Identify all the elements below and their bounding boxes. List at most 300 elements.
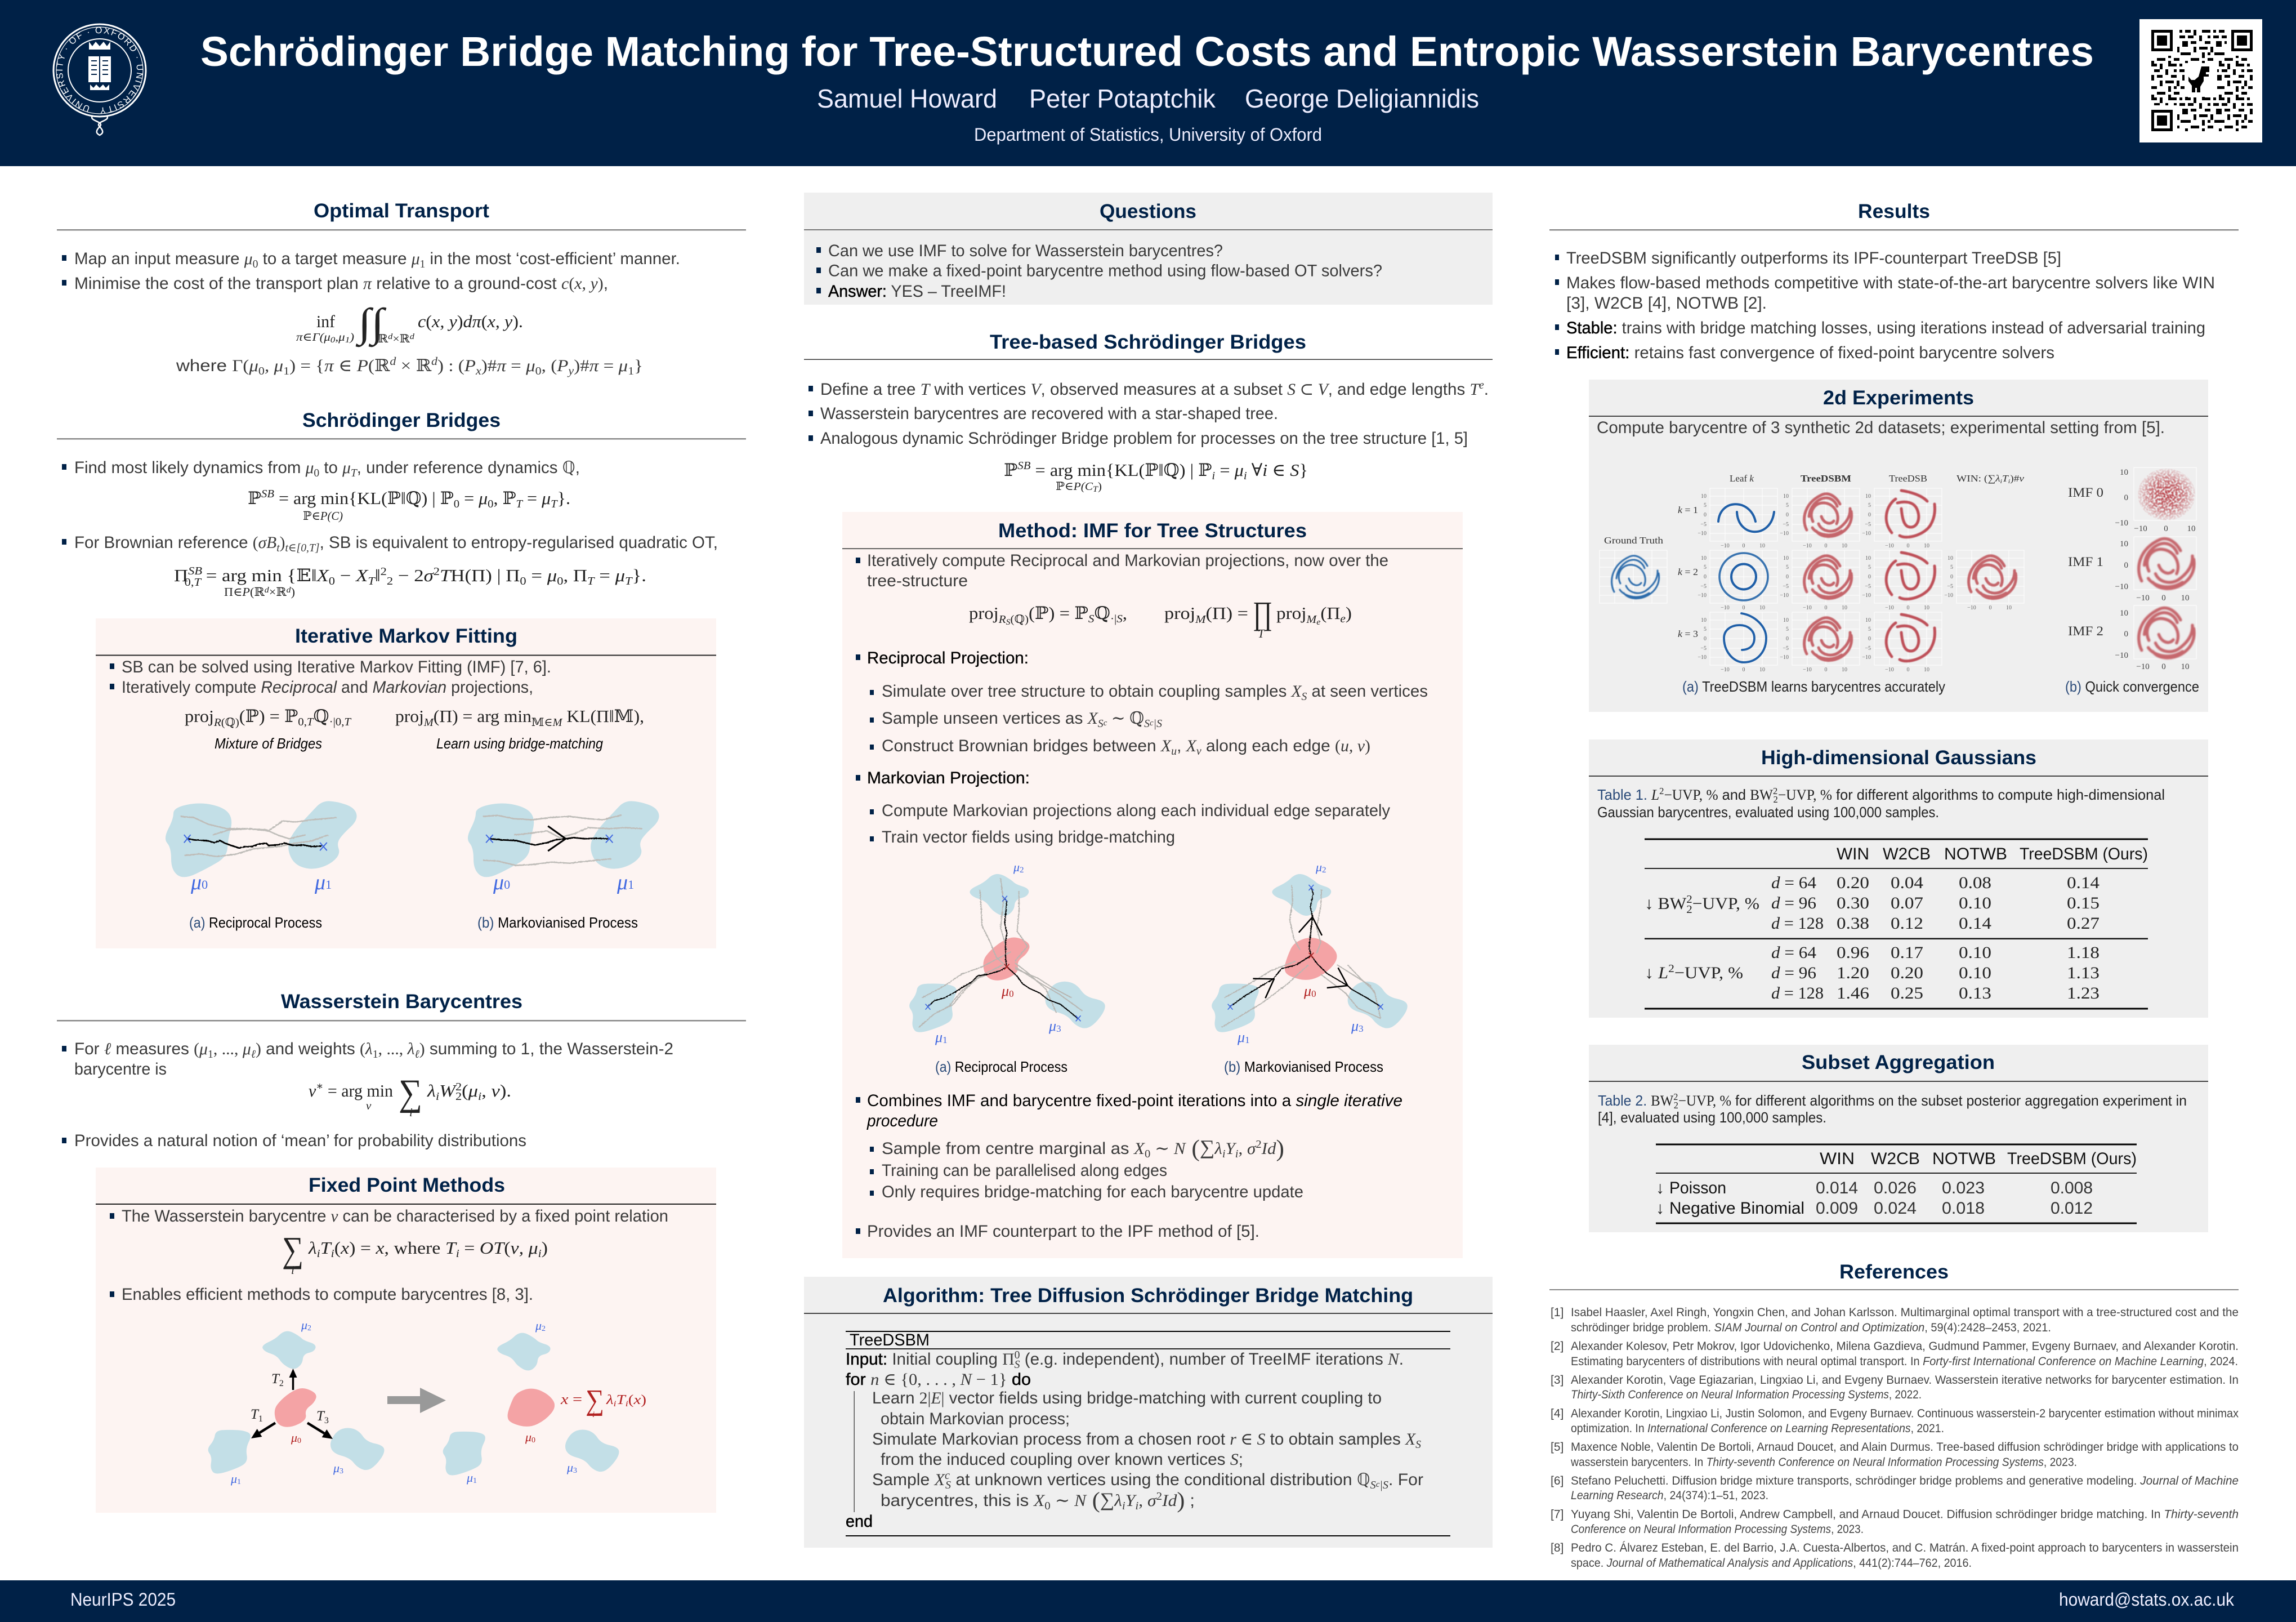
equation: coupling set: y — [567, 365, 574, 377]
algorithm box: Y — [1125, 1491, 1137, 1510]
diagram: barycentre at fixed point — [443, 1318, 646, 1485]
reference list: [8] — [1551, 1541, 1564, 1554]
plot: leaf k=1 — [1698, 488, 1777, 549]
plot: leaf k=1: −10 — [1721, 543, 1730, 549]
equation: coupling set: π = μ — [589, 357, 627, 375]
algorithm box: S — [1370, 1479, 1376, 1491]
equation: entropic OT: X — [315, 565, 329, 585]
plot: TreeDSBM k=1: 10 — [1783, 493, 1789, 500]
equation: Markovian tree projection: proj — [1276, 603, 1305, 623]
reciprocal projection steps: S — [1302, 690, 1307, 703]
table 1: 0.27 — [2067, 914, 2100, 933]
panel: optimal transport — [57, 200, 746, 377]
plot: TreeDSBM k=1: −10 — [1780, 531, 1789, 537]
heading: Results — [1858, 200, 1930, 222]
equation: entropic OT — [174, 565, 646, 599]
diagram: barycentre at fixed point: T — [617, 1393, 627, 1407]
reciprocal projection steps: c — [1104, 719, 1107, 728]
diagram: barycentre at fixed point: i — [592, 1410, 595, 1419]
equation: tree SB: ) — [1098, 480, 1102, 493]
bullets: Stable: trains with bridge matching losses, using iterations instead of adversarial training — [1566, 319, 2205, 337]
reciprocal projection steps: u — [1171, 745, 1177, 757]
equation: entropic OT: d — [265, 586, 269, 595]
reference list: Yuyang Shi, Valentin De Bortoli, Andrew Campbell, and Arnaud Doucet. Diffusion schrödinger bridge matching. In Thirty-seventh — [1571, 1508, 2239, 1521]
equation: SB problem: ℙ∈P(C) — [303, 509, 343, 523]
diagram: barycentre at fixed point: ∑ — [586, 1384, 604, 1416]
reciprocal projection steps: Sample unseen vertices as X — [882, 709, 1098, 728]
equation: entropic OT: T — [587, 575, 596, 587]
table 2: 0.014 — [1816, 1179, 1858, 1197]
plot: TreeDSBM k=2: 10 — [1783, 555, 1789, 562]
equation: entropic OT: T — [625, 575, 633, 587]
bullet: definition — [62, 1040, 673, 1079]
bullet: combined iteration: N — [1173, 1139, 1187, 1158]
bullet: combined iteration — [856, 1091, 1402, 1201]
algorithm box: ∑ — [1100, 1490, 1114, 1510]
equation: coupling set: P — [556, 357, 568, 375]
table 2: ↓ — [1656, 1199, 1664, 1218]
diagram: barycentre at fixed point: 3 — [573, 1467, 577, 1475]
table 1: −UVP, % — [1674, 964, 1743, 982]
diagram: Markovianised process: μ — [493, 871, 504, 894]
table caption: Table 1. L — [1597, 786, 1659, 803]
reciprocal projection steps: Simulate over tree structure to obtain coupling samples X — [882, 682, 1302, 701]
table caption: for different algorithms to compute high-dimensional — [1836, 786, 2173, 803]
heading: Method: IMF for Tree Structures — [998, 520, 1307, 542]
diagram: transport maps to measures: T — [251, 1407, 258, 1422]
bullet list: μ — [411, 249, 420, 268]
table 1: 0.13 — [1959, 984, 1991, 1002]
plot: leaf k=2: 0 — [1742, 605, 1745, 611]
plot: leaf k=3: 10 — [1701, 617, 1707, 623]
plot: leaf k=3: 5 — [1704, 626, 1707, 632]
reference list: Thirty-Sixth Conference on Neural Information Processing Systems, 2022. — [1571, 1388, 1922, 1401]
algorithm box: (e.g. independent), number of TreeIMF iterations — [1020, 1350, 1388, 1369]
plot: TreeDSBM k=1: −5 — [1783, 522, 1789, 528]
diagram: reciprocal process on tree: 2 — [1020, 866, 1024, 875]
equation: entropic OT: − — [335, 565, 356, 585]
bullets — [1555, 249, 2215, 362]
panel: high-dimensional Gaussians — [1589, 739, 2208, 1018]
diagram: transport maps to measures — [208, 1318, 384, 1486]
bullet: Brownian reference: , SB is equivalent to entropy-regularised quadratic OT, — [320, 533, 718, 552]
algorithm box: TreeDSBM — [850, 1331, 930, 1349]
reference list: wasserstein barycenters. In Thirty-seventh Conference on Neural Information Processing Systems, 2023. — [1570, 1456, 2077, 1469]
plot: leaf k=2: −10 — [1721, 605, 1730, 611]
plot: TreeDSBM k=3: −5 — [1783, 645, 1789, 652]
table 2: 0.018 — [1942, 1199, 1985, 1218]
diagram: Markovianised process on tree: μ — [1238, 1029, 1245, 1045]
diagram: Markovianised process on tree: μ — [1304, 983, 1311, 999]
equation: barycentre: ∑ — [399, 1072, 422, 1113]
diagram: Markovianised process on tree: 2 — [1322, 866, 1326, 875]
panel: tree-based Schrödinger bridges — [804, 331, 1493, 494]
algorithm box: i — [1135, 1500, 1138, 1512]
plot: TreeDSBM k=3: 10 — [1842, 667, 1847, 673]
reference list: Alexander Korotin, Vage Egiazarian, Lingxiao Li, and Evgeny Burnaev. Wasserstein iterative networks for barycenter estimation. In — [1571, 1374, 2239, 1387]
equation: coupling set: P — [464, 357, 476, 375]
column headers: i — [2008, 478, 2010, 485]
equation: Markovian tree projection: (Π) = — [1206, 603, 1248, 623]
equation: SB problem: = — [459, 488, 479, 508]
bullet: definition: barycentre is — [74, 1060, 167, 1079]
reciprocal projection steps: S — [1098, 718, 1104, 730]
equation: SB problem — [248, 488, 570, 523]
plot: TreeDSBM k=3: 0 — [1786, 636, 1789, 642]
bullet: definition: , ..., — [378, 1040, 408, 1058]
equation: coupling set: 1 — [283, 365, 289, 377]
table 1: 0.20 — [1891, 964, 1923, 982]
plot: leaf k=3: −10 — [1721, 667, 1730, 673]
bullet: dynamics: to — [319, 458, 342, 477]
diagram: barycentre at fixed point: x = — [560, 1391, 582, 1407]
plot: WIN: 10 — [1947, 555, 1953, 562]
panel: Wasserstein barycentres — [57, 991, 746, 1150]
reference list: Alexander Kolesov, Petr Mokrov, Igor Udovichenko, Milena Gazdieva, Gudmund Pammer, Evgeny Burnaev, and Alexander Korotin. — [1571, 1340, 2239, 1353]
reciprocal projection steps: , — [1177, 737, 1186, 755]
column headers: )# — [2010, 473, 2020, 484]
equation: reciprocal tree projection: ·| — [1110, 613, 1116, 625]
reference list: Learning Research, 24(374):1–51, 2023. — [1571, 1489, 1768, 1502]
reciprocal projection steps: along each edge — [1201, 737, 1335, 755]
table 1: 1.13 — [2067, 964, 2100, 982]
ground truth plot — [1600, 535, 1667, 603]
column headers: i — [2000, 478, 2002, 485]
algorithm box: λ — [1114, 1491, 1122, 1510]
equation: entropic OT: 0 — [520, 575, 526, 587]
diagram: transport maps to measures: μ — [231, 1472, 237, 1486]
equation: entropic OT: SB — [188, 565, 202, 577]
equation: coupling set: 0 — [258, 365, 265, 377]
bullet: combined iteration: 0 — [1145, 1148, 1150, 1160]
equation: OT problem: inf — [316, 311, 336, 331]
row labels: k = 1 — [1678, 505, 1698, 515]
table caption: −UVP, % — [1664, 787, 1718, 803]
bullet list: 0 — [253, 258, 258, 270]
algorithm box: from the induced coupling over known vertices S; — [881, 1450, 1243, 1469]
equation: reciprocal projection: proj — [185, 706, 213, 726]
plot: TreeDSBM k=3: −10 — [1780, 654, 1789, 661]
bullet: definition: 1 — [373, 1048, 378, 1060]
diagram: transport maps to measures: μ — [333, 1461, 340, 1475]
algorithm box: Input: Initial coupling Π — [846, 1350, 1015, 1369]
plot: TreeDSBM k=3: 10 — [1783, 617, 1789, 623]
diagram: barycentre at fixed point: 1 — [473, 1477, 477, 1485]
diagram: barycentre at fixed point: 2 — [542, 1325, 546, 1333]
plot: TreeDSBM k=3: 0 — [1824, 667, 1828, 673]
equation: barycentre: = arg min — [323, 1081, 393, 1100]
reciprocal projection steps: X — [1186, 737, 1198, 755]
table caption: [4], evaluated using 100,000 samples. — [1598, 1109, 1826, 1126]
footer — [0, 1580, 2296, 1622]
bullets: Efficient: retains fast convergence of fixed-point barycentre solvers — [1566, 344, 2054, 362]
algorithm box: obtain Markovian process; — [881, 1410, 1070, 1428]
bullet: definition: ℓ — [251, 1048, 256, 1060]
plot: leaf k=1: 0 — [1704, 512, 1707, 518]
table caption: 2 — [1674, 1100, 1678, 1111]
bullet: definition: λ — [407, 1040, 414, 1058]
icon: University of Oxford crest: UNIVERSITY · OF · OXFORD · UNIVERSITY — [56, 27, 143, 114]
equation: coupling set: )# — [481, 357, 497, 375]
heading: High-dimensional Gaussians — [1761, 747, 2036, 769]
diagram: barycentre at fixed point: λ — [606, 1393, 614, 1407]
panel: 2d experiments — [1589, 380, 2208, 712]
plot: leaf k=1: 5 — [1704, 502, 1707, 509]
equation: reciprocal tree projection: (ℚ) — [1011, 613, 1029, 626]
algorithm box: Learn 2|E| vector fields using bridge-matching with current coupling to — [872, 1389, 1382, 1407]
diagram: barycentre at fixed point: μ — [525, 1430, 531, 1444]
diagram: transport maps to measures: 1 — [237, 1478, 241, 1486]
table 1: 1.20 — [1837, 964, 1869, 982]
equation: fixed point: ∑ — [282, 1229, 303, 1269]
diagram: transport maps to measures: μ — [301, 1318, 307, 1332]
plot: TreeDSB k=2: 10 — [1924, 605, 1929, 611]
equation: entropic OT: T — [368, 575, 376, 587]
diagram: transport maps to measures: 3 — [324, 1416, 329, 1425]
bullet: dynamics: Find most likely dynamics from μ — [74, 458, 314, 477]
diagram: reciprocal process on tree: 3 — [1056, 1023, 1061, 1034]
diagram: barycentre at fixed point: i — [626, 1400, 628, 1409]
diagram: transport maps to measures: 1 — [258, 1414, 263, 1424]
algorithm box: S — [945, 1479, 951, 1491]
algorithm box: ∼ — [1051, 1491, 1074, 1510]
equation: reciprocal projection: ℚ — [314, 706, 329, 726]
table caption: −UVP, % — [1678, 1093, 1731, 1109]
equation: coupling set: , ( — [542, 357, 557, 375]
algorithm box: S — [1015, 1358, 1020, 1371]
diagram: Markovianised process on tree: μ — [1316, 860, 1322, 874]
equation: SB problem: = — [522, 488, 542, 508]
table 1: 0.25 — [1891, 984, 1923, 1002]
bullet: combined iteration: ∼ — [1150, 1139, 1174, 1158]
equation: Markovian tree projection: M — [1195, 613, 1207, 626]
reciprocal projection steps: Reciprocal Projection: — [867, 649, 1029, 667]
equation: entropic OT: μ — [614, 565, 625, 585]
table 1: 0.14 — [1959, 914, 1991, 933]
equation: coupling set: 0 — [535, 365, 542, 377]
plot: IMF 0: −10 — [2134, 524, 2147, 533]
bullets: Can we use IMF to solve for Wasserstein barycentres? — [828, 242, 1223, 260]
plot: leaf k=3: 0 — [1704, 636, 1707, 642]
equation: barycentre: i — [478, 1090, 481, 1103]
plot: IMF 0: 10 — [2120, 468, 2128, 477]
plot: TreeDSBM k=1: 0 — [1786, 512, 1789, 518]
algorithm box: Sample X — [872, 1471, 945, 1489]
bullets: Iteratively compute Reciprocal and Markovian projections, — [122, 678, 533, 697]
bullet: dynamics — [62, 458, 580, 479]
table 1: 0.10 — [1959, 894, 1991, 912]
caption b: (b) Markovianised Process — [477, 914, 638, 931]
equation: reciprocal tree projection: , — [1123, 603, 1127, 623]
authors: Peter Potaptchik — [1029, 84, 1216, 113]
equation: entropic OT: ×ℝ — [269, 585, 287, 599]
column headers: WIN: (∑ λ — [1956, 473, 2000, 484]
equation: entropic OT: 0 — [329, 575, 335, 587]
equation: coupling set: × ℝ — [396, 357, 432, 375]
plot: IMF 1: IMF 1 — [2068, 555, 2103, 569]
diagram: reciprocal process on tree — [909, 860, 1105, 1045]
equation: entropic OT: − 2 — [393, 565, 424, 585]
diagram: transport maps to measures: T — [271, 1371, 279, 1387]
diagram: Markovianised process on tree: 1 — [1245, 1035, 1250, 1045]
equation: entropic OT: , Π — [563, 565, 587, 585]
algorithm box: , — [1138, 1491, 1147, 1510]
reference list: Maxence Noble, Valentin De Bortoli, Arnaud Doucet, and Alain Durmus. Tree-based diffusion schrödinger bridge with applications to — [1571, 1441, 2239, 1454]
table 1: 2 — [1686, 903, 1692, 916]
caption a: (a) Reciprocal Process — [189, 914, 322, 931]
reference list: Alexander Korotin, Lingxiao Li, Justin Solomon, and Evgeny Burnaev. Continuous wasserstein-2 barycenter estimation without minimax — [1571, 1407, 2239, 1420]
plot: IMF 2: −10 — [2115, 651, 2128, 660]
plot: WIN: −10 — [1967, 605, 1976, 611]
bullet: projections: Iteratively compute Reciprocal and Markovian projections, now over the — [867, 551, 1388, 570]
equation: SB problem: μ — [478, 488, 488, 508]
plot: leaf k=2: 5 — [1704, 564, 1707, 571]
plot: IMF 2: 0 — [2161, 662, 2166, 671]
equation: entropic OT: 2 — [434, 565, 440, 578]
equation: entropic OT: μ — [547, 565, 557, 585]
plot: TreeDSB k=3: −5 — [1865, 645, 1871, 652]
diagram: transport maps to measures: T — [316, 1409, 324, 1424]
panel: subset aggregation — [1589, 1045, 2208, 1232]
bullet list — [62, 249, 680, 293]
bullets: [3], W2CB [4], NOTWB [2]. — [1566, 294, 1767, 313]
equation: barycentre: ν — [309, 1081, 316, 1100]
header banner — [0, 0, 2296, 166]
equation: SB problem: }. — [557, 488, 570, 508]
bullet: combined iteration: Combines IMF and barycentre fixed-point iterations into a single iterative — [867, 1091, 1402, 1110]
diagram: Markovianised process: 0 — [504, 877, 510, 892]
panel: fixed point methods — [96, 1168, 716, 1513]
table 1: 0.10 — [1959, 964, 1991, 982]
equation: fixed point: T — [320, 1238, 333, 1258]
plot: IMF 1: −10 — [2136, 594, 2150, 603]
table 1: 0.07 — [1891, 894, 1923, 912]
plot: TreeDSBM k=1: 0 — [1824, 543, 1828, 549]
equation: coupling set: π = μ — [497, 357, 534, 375]
plot: TreeDSB k=2: −5 — [1865, 583, 1871, 590]
diagram: reciprocal process on tree: μ — [1002, 983, 1009, 999]
algorithm box: barycentres, this is X — [881, 1491, 1044, 1510]
plot: IMF 1: 0 — [2124, 561, 2128, 570]
equation: reciprocal projection: T — [307, 716, 314, 728]
plot: TreeDSB k=3 — [1862, 612, 1942, 673]
bullets: e — [1479, 379, 1484, 391]
panel: algorithm — [804, 1277, 1493, 1548]
plot: leaf k=2: 10 — [1759, 605, 1765, 611]
diagram: reciprocal process on tree: μ — [935, 1029, 942, 1045]
equation: coupling set: ) : ( — [437, 357, 464, 375]
equation: OT problem: ℝ — [378, 333, 387, 345]
authors: George Deligiannidis — [1245, 84, 1479, 113]
plot: TreeDSB k=2: −10 — [1885, 605, 1894, 611]
equation: Markovian tree projection: ) — [1346, 603, 1352, 623]
Markovian projection steps: Compute Markovian projections along each individual edge separately — [882, 801, 1390, 820]
plot: leaf k=3: 0 — [1742, 667, 1745, 673]
plot: IMF 1: 10 — [2120, 540, 2128, 549]
bullet: combined iteration: Sample from centre marginal as X — [882, 1139, 1144, 1158]
heading: Iterative Markov Fitting — [295, 625, 517, 647]
equation: OT problem: ×ℝ — [392, 333, 410, 345]
bullet: IPF counterpart: Provides an IMF counterpart to the IPF method of [5]. — [867, 1222, 1259, 1241]
diagram: reciprocal process: μ — [315, 871, 325, 894]
plot: TreeDSB k=1 — [1862, 488, 1942, 549]
table 1: 2 — [1668, 962, 1674, 975]
bullet: definition: For ℓ measures (μ — [74, 1040, 208, 1058]
diagram: Markovianised process: μ — [617, 871, 628, 894]
equation: OT problem — [296, 300, 523, 347]
equation: Markovian tree projection: T — [1258, 627, 1265, 640]
plot: TreeDSBM k=1 — [1780, 488, 1860, 549]
plot: TreeDSB k=1: 5 — [1868, 502, 1871, 509]
equation: Markovian projection: KL(Π‖𝕄), — [562, 706, 644, 726]
plot: TreeDSB k=2: −10 — [1862, 592, 1871, 599]
table 1: 0.04 — [1891, 874, 1923, 892]
table 2: NOTWB — [1932, 1149, 1996, 1168]
reference list: [1] — [1551, 1306, 1564, 1319]
reciprocal projection steps: at seen vertices — [1307, 682, 1428, 701]
plot: IMF 0: 0 — [2124, 493, 2128, 502]
QR code — [2139, 19, 2262, 142]
equation: fixed point: x) = x, where T — [341, 1238, 455, 1258]
equation: entropic OT: ) — [291, 585, 295, 599]
plot: TreeDSBM k=2: −10 — [1803, 605, 1812, 611]
bullet list: Minimise the cost of the transport plan π relative to a ground-cost c(x, y), — [74, 274, 608, 293]
table 2: 0.012 — [2051, 1199, 2093, 1218]
plot: IMF 0: −10 — [2115, 519, 2128, 528]
algorithm box: N. — [1388, 1350, 1404, 1369]
equation: Markovian tree projection: M — [1306, 613, 1317, 626]
reciprocal projection steps: S — [1144, 718, 1150, 730]
equation: tree SB: T — [1093, 485, 1099, 494]
bullet list: Map an input measure μ — [74, 249, 253, 268]
bullet: efficient methods: Enables efficient methods to compute barycentres [8, 3]. — [122, 1285, 533, 1304]
table caption: Gaussian barycentres, evaluated using 100,000 samples. — [1597, 804, 1939, 821]
bullet: dynamics: , under reference dynamics ℚ, — [357, 458, 580, 477]
table 1: d = 128 — [1771, 914, 1824, 933]
table 2: ↓ — [1656, 1179, 1664, 1197]
algorithm box: c — [1376, 1480, 1380, 1489]
equation: fixed point: i — [331, 1247, 334, 1260]
algorithm box: 2 — [1156, 1490, 1162, 1503]
diagram: Markovianised process — [468, 801, 659, 894]
equation: Markovian projection: (Π) = arg min — [434, 706, 531, 726]
column headers: TreeDSB — [1889, 473, 1927, 484]
equation: OT problem: π∈Γ(μ — [296, 331, 326, 344]
plot: TreeDSBM k=1: 10 — [1842, 543, 1847, 549]
plot: IMF 1: 10 — [2181, 594, 2189, 603]
equation: OT problem: ,μ — [335, 331, 345, 344]
arrow: T3 — [307, 1423, 333, 1439]
equation: Markovian tree projection: e — [1316, 618, 1321, 627]
plot: leaf k=1: 10 — [1701, 493, 1707, 500]
table caption: Table 2. BW — [1598, 1092, 1674, 1109]
equation: tree SB: = — [1215, 460, 1235, 480]
table 1: 0.20 — [1837, 874, 1869, 892]
plot: TreeDSBM k=2: 0 — [1824, 605, 1828, 611]
bullet: Brownian reference: ) — [280, 533, 285, 552]
equation: coupling set: , μ — [265, 357, 283, 375]
heading: Fixed Point Methods — [309, 1174, 505, 1196]
diagram: barycentre at fixed point: 0 — [531, 1436, 535, 1445]
column headers: Leaf k — [1730, 473, 1754, 484]
diagram: transport maps to measures: 2 — [279, 1379, 284, 1388]
plot: TreeDSB k=2: 5 — [1868, 564, 1871, 571]
equation: reciprocal tree projection: proj — [969, 603, 997, 623]
row labels — [1678, 505, 1698, 639]
diagram: reciprocal process on tree: μ — [1049, 1018, 1056, 1034]
panel: Schrödinger bridges — [57, 409, 746, 599]
table 1: 0.17 — [1891, 943, 1923, 962]
